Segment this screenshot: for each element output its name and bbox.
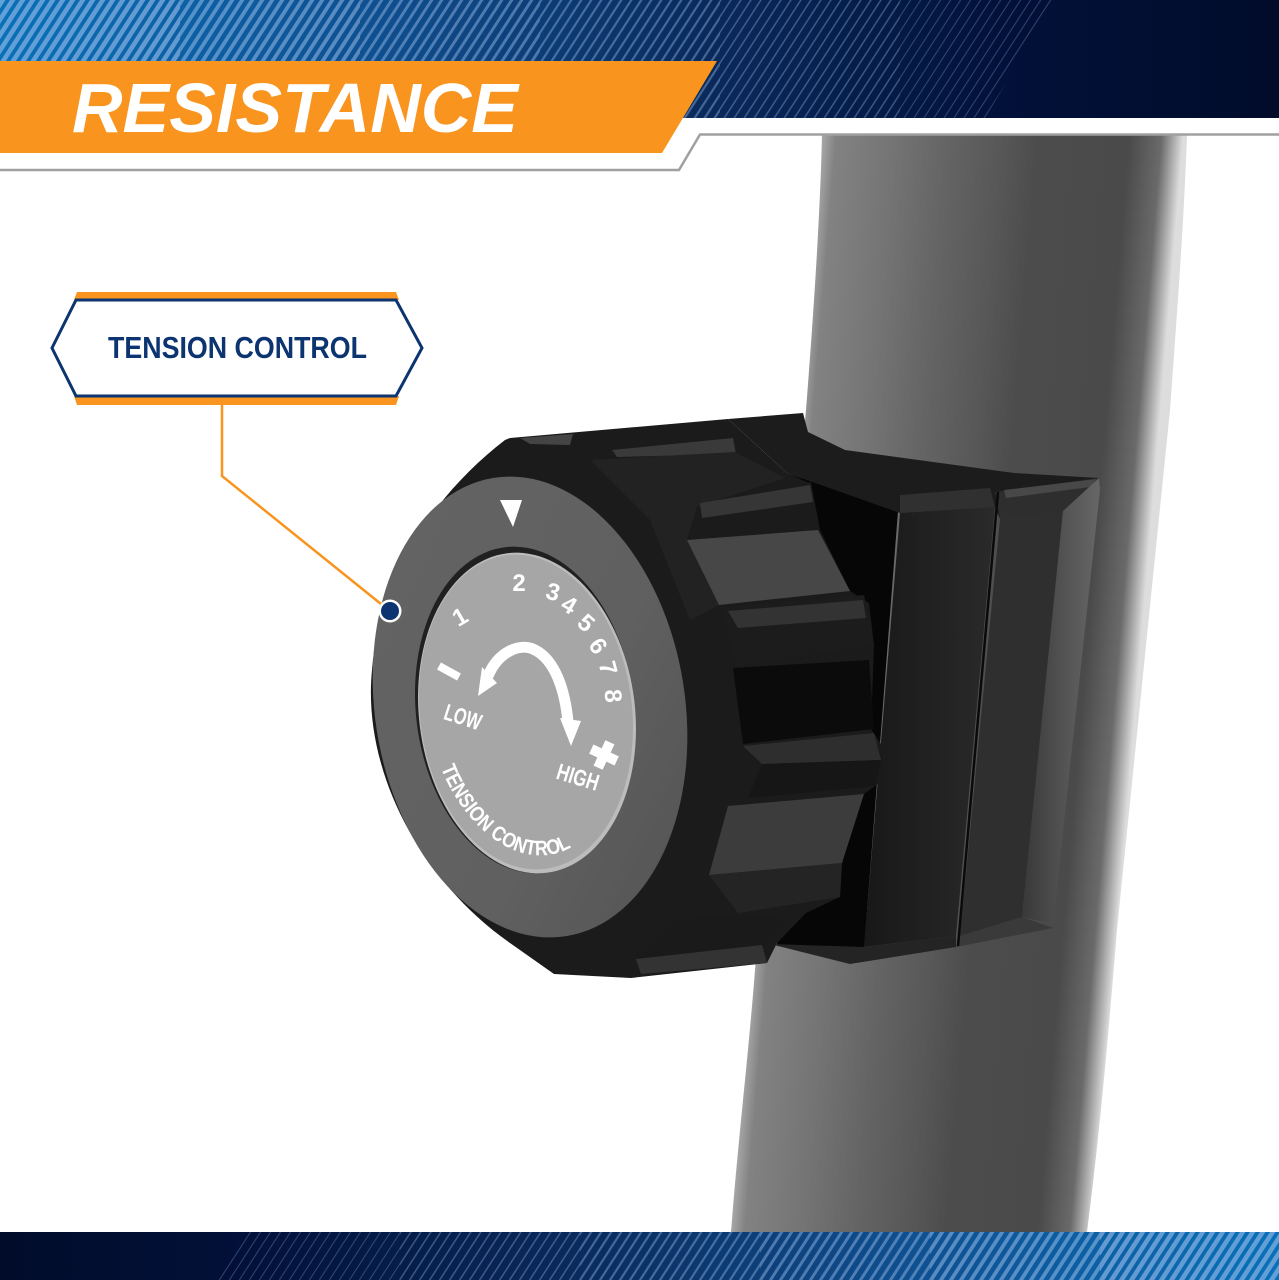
bottom banner (0, 1232, 1279, 1280)
title: RESISTANCE (72, 69, 520, 147)
dial numbers: 8 (598, 688, 627, 704)
tension knob (370, 419, 881, 978)
knob face ring (341, 454, 719, 960)
dial plate (397, 534, 654, 886)
knob ribs (636, 482, 881, 974)
leader line (222, 405, 402, 622)
dial numbers: 7 (593, 658, 622, 678)
high label: HIGH (554, 758, 602, 796)
low label: LOW (441, 699, 485, 735)
dial numbers: 1 (448, 602, 473, 632)
plus sign (585, 736, 623, 774)
dial numbers: 2 (512, 570, 526, 597)
ribbon underline (0, 134, 1279, 170)
direction arrow (478, 647, 581, 746)
dial numbers: 6 (583, 633, 612, 660)
title ribbon (0, 61, 717, 153)
dial numbers: 3 (543, 578, 563, 607)
minus sign (439, 666, 459, 677)
pointer triangle (500, 500, 522, 527)
dial numbers: 5 (572, 609, 600, 638)
dial numbers (448, 570, 627, 704)
mounting block (728, 413, 1100, 964)
dial numbers: 4 (556, 590, 582, 621)
metal pole (731, 135, 1187, 1232)
callout: tension control: TENSION CONTROL (108, 330, 367, 365)
dial caption: TENSION CONTROL (442, 762, 571, 856)
knob ribbed body (371, 419, 881, 978)
knob upper grip highlights (520, 434, 785, 620)
callout: tension control (52, 292, 422, 405)
top banner (0, 0, 1279, 118)
